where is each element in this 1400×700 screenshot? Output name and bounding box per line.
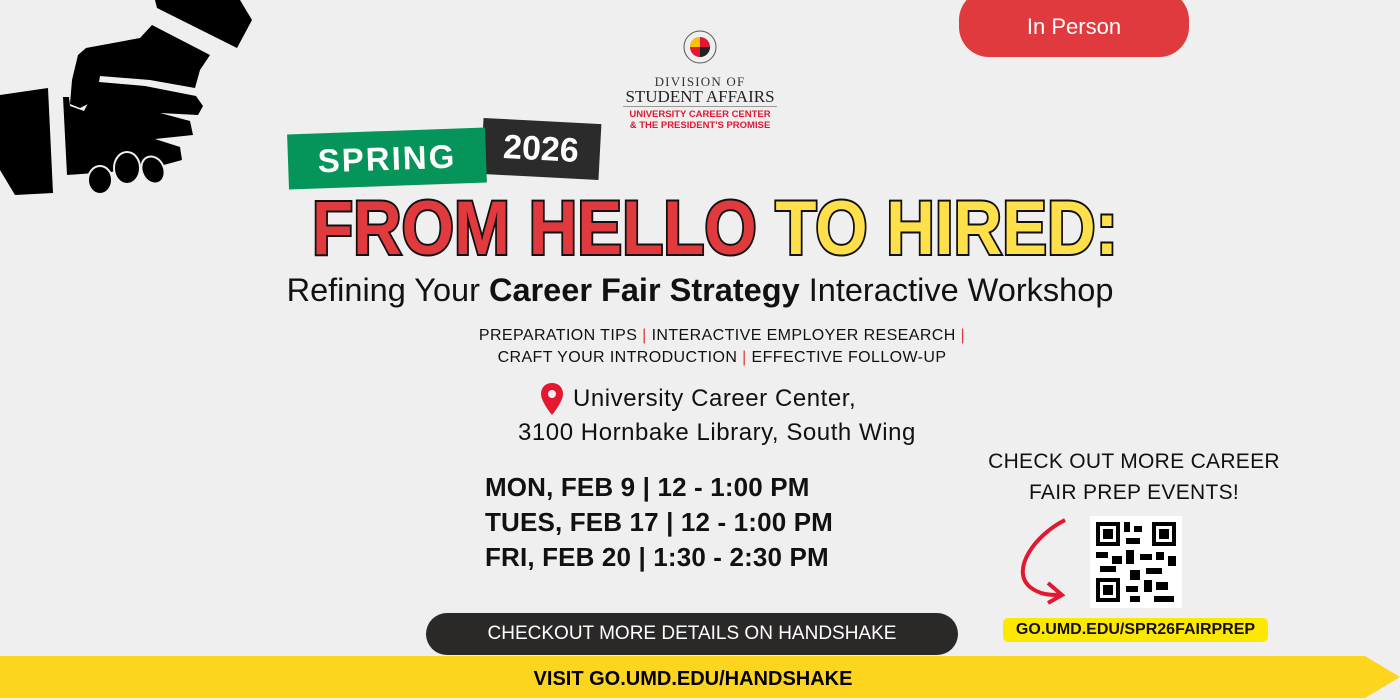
banner: visit handshake bbox=[0, 656, 1400, 698]
button: handshake details: CHECKOUT MORE DETAILS ON HANDSHAKE bbox=[488, 623, 896, 644]
tag: spring 2026: SPRING bbox=[317, 138, 457, 179]
callout: more events: CHECK OUT MORE CAREER bbox=[988, 450, 1280, 473]
location text: 3100 Hornbake Library, South Wing bbox=[518, 419, 916, 446]
logo: division of student affairs: STUDENT AFFAIRS bbox=[625, 87, 775, 106]
tag: spring 2026 bbox=[287, 118, 602, 190]
link label: fair prep: GO.UMD.EDU/SPR26FAIRPREP bbox=[1016, 621, 1255, 638]
topics: PREPARATION TIPS | INTERACTIVE EMPLOYER RESEARCH | bbox=[479, 327, 965, 344]
tag: spring 2026: 2026 bbox=[502, 128, 580, 170]
callout: more events: FAIR PREP EVENTS! bbox=[1029, 481, 1239, 504]
arrow: red curved bbox=[1020, 518, 1066, 605]
badge: in person bbox=[959, 0, 1189, 57]
dates: FRI, FEB 20 | 1:30 - 2:30 PM bbox=[485, 542, 829, 572]
link label: fair prep bbox=[1003, 618, 1268, 642]
banner: visit handshake: VISIT GO.UMD.EDU/HANDSHAKE bbox=[534, 668, 852, 690]
location text: University Career Center, bbox=[573, 385, 856, 412]
callout: more events bbox=[988, 450, 1280, 504]
button: handshake details bbox=[426, 613, 958, 655]
subtitle: Refining Your Career Fair Strategy Interactive Workshop bbox=[287, 272, 1113, 308]
dates: TUES, FEB 17 | 12 - 1:00 PM bbox=[485, 507, 833, 537]
icon: handshake bbox=[0, 0, 252, 195]
badge: in person: In Person bbox=[1027, 14, 1121, 39]
logo: division of student affairs: DIVISION OF bbox=[655, 74, 745, 89]
icon: location pin bbox=[541, 383, 563, 415]
qr code bbox=[1090, 516, 1182, 608]
logo: division of student affairs bbox=[623, 30, 777, 131]
topics: CRAFT YOUR INTRODUCTION | EFFECTIVE FOLLOW-UP bbox=[498, 349, 946, 366]
dates bbox=[485, 472, 833, 572]
topics bbox=[479, 327, 965, 366]
location text bbox=[518, 385, 916, 446]
dates: MON, FEB 9 | 12 - 1:00 PM bbox=[485, 472, 810, 502]
logo: division of student affairs: UNIVERSITY CAREER CENTER bbox=[629, 109, 771, 120]
logo: division of student affairs: & THE PRESIDENT'S PROMISE bbox=[630, 120, 770, 131]
